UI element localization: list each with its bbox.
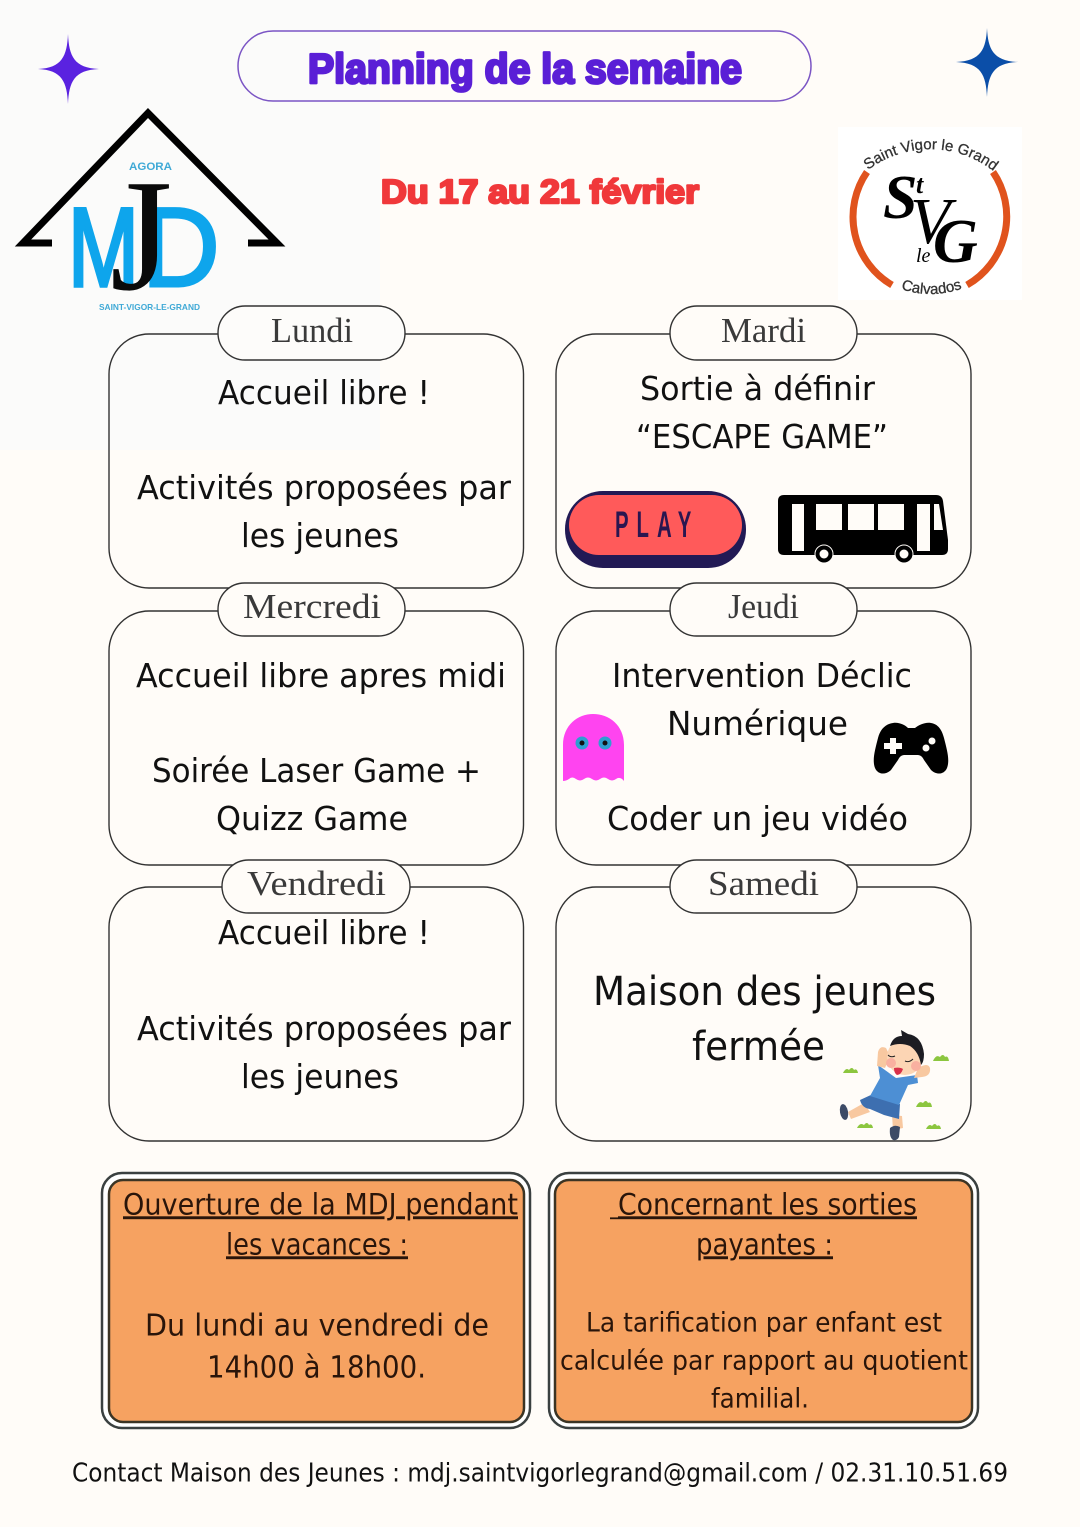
Vendredi activities xyxy=(137,913,511,1096)
title xyxy=(238,31,811,101)
logo: MJD Agora: SAINT-VIGOR-LE-GRAND xyxy=(99,302,200,312)
vacation hours text: Du lundi au vendredi de xyxy=(145,1308,489,1343)
label: Lundi: Lundi xyxy=(271,311,353,350)
outings heading xyxy=(610,1187,917,1261)
outings text: calculée par rapport au quotient xyxy=(560,1345,968,1376)
panel: vacation opening hours xyxy=(102,1173,530,1428)
vacation hours text: 14h00 à 18h00. xyxy=(207,1350,426,1385)
outings heading: Concernant les sorties xyxy=(618,1187,917,1221)
Vendredi activities: les jeunes xyxy=(241,1057,399,1096)
icon: blue star xyxy=(956,28,1018,97)
panel: Mardi xyxy=(556,334,971,588)
panel: Jeudi xyxy=(556,611,971,865)
Lundi activities: les jeunes xyxy=(241,516,399,555)
logo: Saint Vigor le Grand: S xyxy=(883,164,917,232)
icon: play button xyxy=(565,491,746,568)
Lundi activities: Activités proposées par xyxy=(137,468,511,507)
Mercredi activities: Accueil libre apres midi xyxy=(136,656,506,695)
Lundi activities xyxy=(137,373,511,555)
panel: Vendredi xyxy=(109,887,524,1141)
outings text xyxy=(560,1307,968,1414)
logo: Saint Vigor le Grand: Saint Vigor le Grand xyxy=(864,138,1000,171)
Mercredi activities: Soirée Laser Game + xyxy=(152,751,481,790)
label: Samedi: Samedi xyxy=(708,864,819,903)
Mardi activities: Sortie à définir xyxy=(640,369,875,408)
logo: Saint Vigor le Grand xyxy=(850,138,1010,294)
panel: Lundi xyxy=(109,334,524,588)
logo: Saint Vigor le Grand: G xyxy=(933,208,978,276)
logo: Saint Vigor le Grand: V xyxy=(910,185,957,258)
logo: MJD Agora: AGORA xyxy=(129,161,172,173)
Mercredi activities xyxy=(136,656,506,838)
logo: MJD Agora: M xyxy=(68,186,139,311)
label: Jeudi xyxy=(670,583,857,636)
icon: play button: PLAY xyxy=(615,505,699,546)
Samedi message xyxy=(593,969,936,1070)
Jeudi activities: Coder un jeu vidéo xyxy=(607,799,908,838)
Mercredi activities: Quizz Game xyxy=(216,799,408,838)
logo: Saint Vigor le Grand: Calvados xyxy=(902,280,962,294)
panel: Samedi xyxy=(556,887,971,1141)
icon: sleeping boy xyxy=(839,1030,949,1140)
Lundi activities: Accueil libre ! xyxy=(218,373,430,412)
outings text: La tarification par enfant est xyxy=(586,1307,942,1338)
icon: game controller xyxy=(874,723,948,774)
label: Vendredi xyxy=(222,860,410,913)
label: Jeudi: Jeudi xyxy=(728,587,799,626)
icon: pink ghost xyxy=(563,714,624,781)
outings heading: payantes : xyxy=(696,1227,833,1261)
Jeudi activities: Numérique xyxy=(667,704,848,743)
panel: Mercredi xyxy=(109,611,524,865)
Mardi activities: “ESCAPE GAME” xyxy=(636,417,888,456)
Vendredi activities: Accueil libre ! xyxy=(218,913,430,952)
title: Planning de la semaine xyxy=(308,45,742,92)
label: Mardi: Mardi xyxy=(721,311,806,350)
icon: purple star xyxy=(38,34,99,104)
Jeudi activities xyxy=(607,656,912,838)
panel: paid outings xyxy=(549,1173,978,1428)
label: Vendredi: Vendredi xyxy=(247,864,386,903)
logo: MJD Agora xyxy=(23,113,277,324)
logo: Saint Vigor le Grand: t xyxy=(916,170,924,199)
label: Lundi xyxy=(218,306,405,360)
icon: bus xyxy=(778,495,948,563)
label: Mardi xyxy=(670,306,857,360)
vacation heading xyxy=(123,1187,518,1261)
contact line: Contact Maison des Jeunes : mdj.saintvigorlegrand@gmail.com / 02.31.10.51.69 xyxy=(72,1458,1008,1488)
Mardi activities xyxy=(636,369,888,456)
label: Mercredi xyxy=(218,583,405,636)
Vendredi activities: Activités proposées par xyxy=(137,1009,511,1048)
logo: Saint Vigor le Grand: le xyxy=(916,245,931,267)
vacation heading: Ouverture de la MDJ pendant xyxy=(123,1187,518,1221)
logo: MJD Agora: D xyxy=(142,186,220,310)
vacation hours text xyxy=(145,1308,489,1385)
logo: MJD Agora: J xyxy=(110,146,172,324)
label: Mercredi: Mercredi xyxy=(243,587,381,626)
Jeudi activities: Intervention Déclic xyxy=(612,656,912,695)
outings text: familial. xyxy=(711,1383,809,1414)
date heading: Du 17 au 21 février xyxy=(381,173,699,210)
label: Samedi xyxy=(670,860,857,913)
Samedi message: fermée xyxy=(692,1024,825,1070)
Samedi message: Maison des jeunes xyxy=(593,969,936,1015)
vacation heading: les vacances : xyxy=(226,1227,408,1261)
